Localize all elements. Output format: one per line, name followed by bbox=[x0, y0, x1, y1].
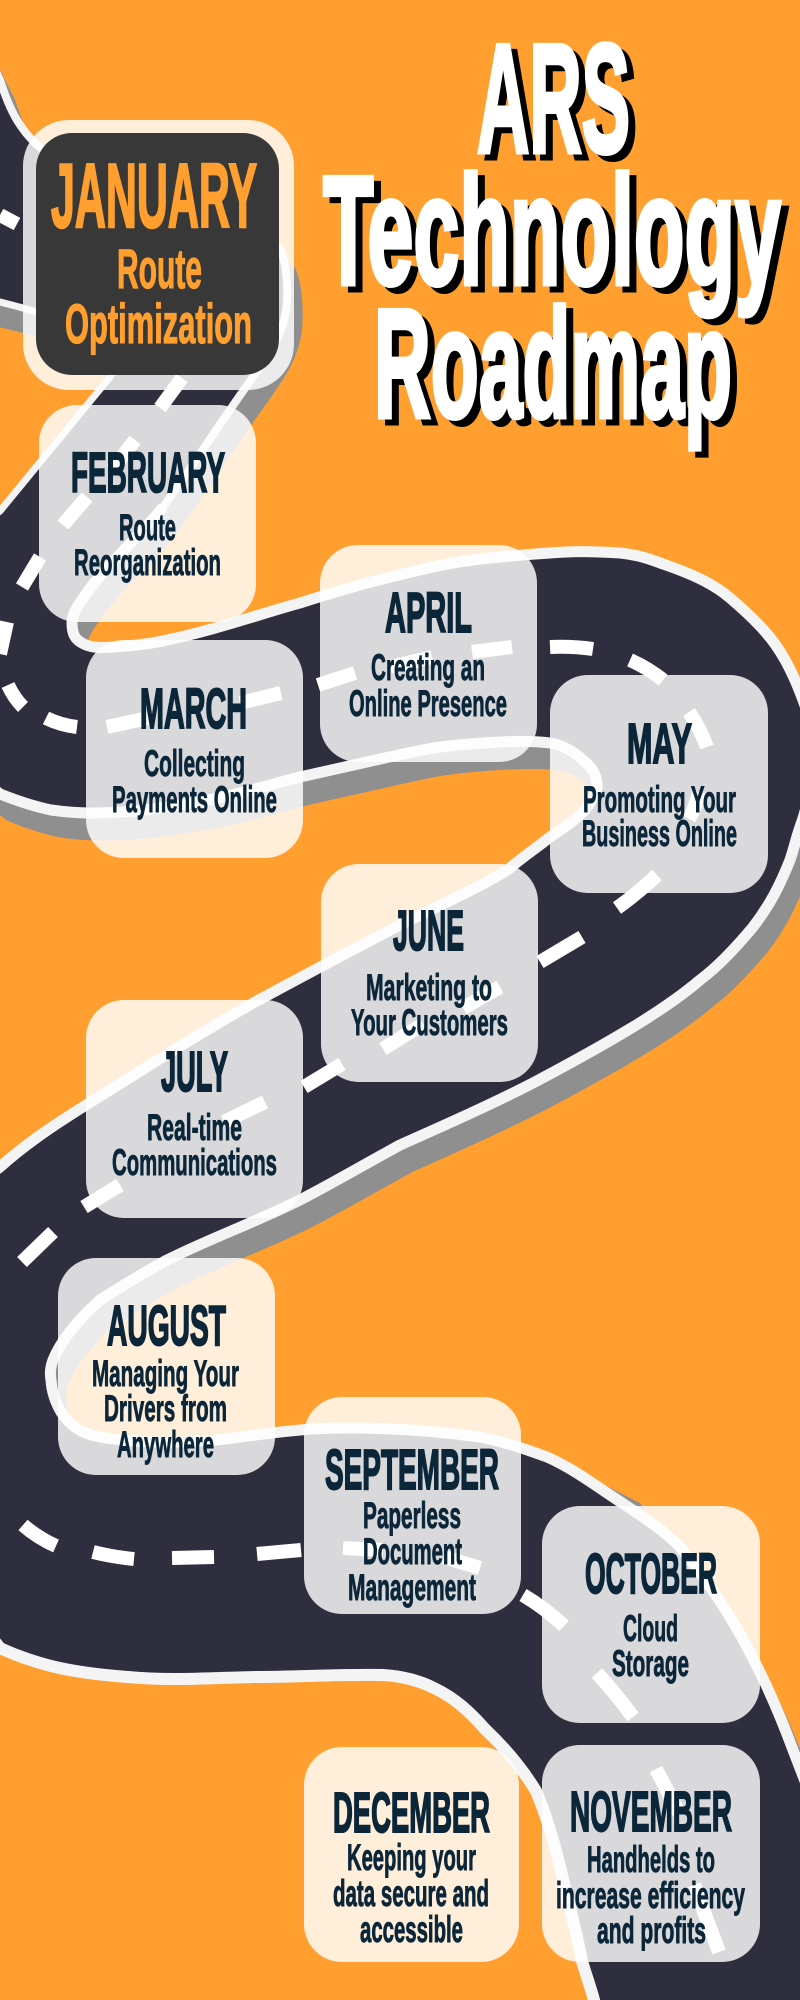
card: January: JANUARY bbox=[51, 146, 257, 247]
card: July: JULY bbox=[161, 1040, 228, 1104]
card: July: Real-time bbox=[147, 1107, 242, 1148]
card: December: accessible bbox=[360, 1909, 463, 1950]
card: November bbox=[542, 1745, 760, 1962]
card: April: APRIL bbox=[385, 581, 472, 645]
card: January bbox=[23, 120, 294, 390]
card: August: Drivers from bbox=[104, 1388, 227, 1429]
card: May: MAY bbox=[627, 712, 692, 776]
card: September: SEPTEMBER bbox=[325, 1438, 499, 1502]
title bbox=[323, 12, 781, 450]
card: June: JUNE bbox=[393, 899, 464, 963]
card: February: Route bbox=[119, 507, 176, 548]
card: March: Collecting bbox=[144, 743, 245, 784]
card: December: Keeping your bbox=[347, 1837, 476, 1878]
card: June: Your Customers bbox=[351, 1002, 508, 1043]
card: December bbox=[304, 1747, 519, 1962]
card: August: Anywhere bbox=[117, 1424, 214, 1465]
title: ARS bbox=[477, 12, 630, 185]
card: January: Optimization bbox=[65, 292, 252, 355]
card: March: MARCH bbox=[140, 677, 247, 741]
card: October: Storage bbox=[612, 1643, 689, 1684]
card: June bbox=[321, 864, 538, 1082]
card: April bbox=[320, 545, 537, 762]
card: May bbox=[550, 675, 768, 893]
card: March: Payments Online bbox=[112, 779, 277, 820]
card: March bbox=[86, 640, 303, 858]
card: September bbox=[304, 1397, 521, 1614]
card: September: Management bbox=[348, 1567, 476, 1608]
card: June: Marketing to bbox=[366, 967, 492, 1008]
card: July bbox=[86, 1000, 303, 1218]
card: November: and profits bbox=[597, 1910, 706, 1951]
road centre dashes bbox=[0, 215, 719, 1952]
card: December: data secure and bbox=[333, 1873, 489, 1914]
card: September: Paperless bbox=[363, 1495, 461, 1536]
card: September: Document bbox=[363, 1531, 462, 1572]
card: February: Reorganization bbox=[74, 542, 221, 583]
card: December: DECEMBER bbox=[333, 1781, 490, 1845]
card: August: Managing Your bbox=[92, 1353, 239, 1394]
card: February: FEBRUARY bbox=[71, 441, 225, 505]
card: October bbox=[542, 1506, 760, 1723]
card: April: Online Presence bbox=[349, 683, 507, 724]
card: August: AUGUST bbox=[107, 1294, 226, 1358]
card: October: Cloud bbox=[623, 1608, 678, 1649]
card: January: Route bbox=[117, 237, 202, 300]
card: July: Communications bbox=[112, 1142, 277, 1183]
card: February bbox=[39, 405, 256, 622]
card: August bbox=[58, 1258, 275, 1475]
card: April: Creating an bbox=[371, 647, 485, 688]
